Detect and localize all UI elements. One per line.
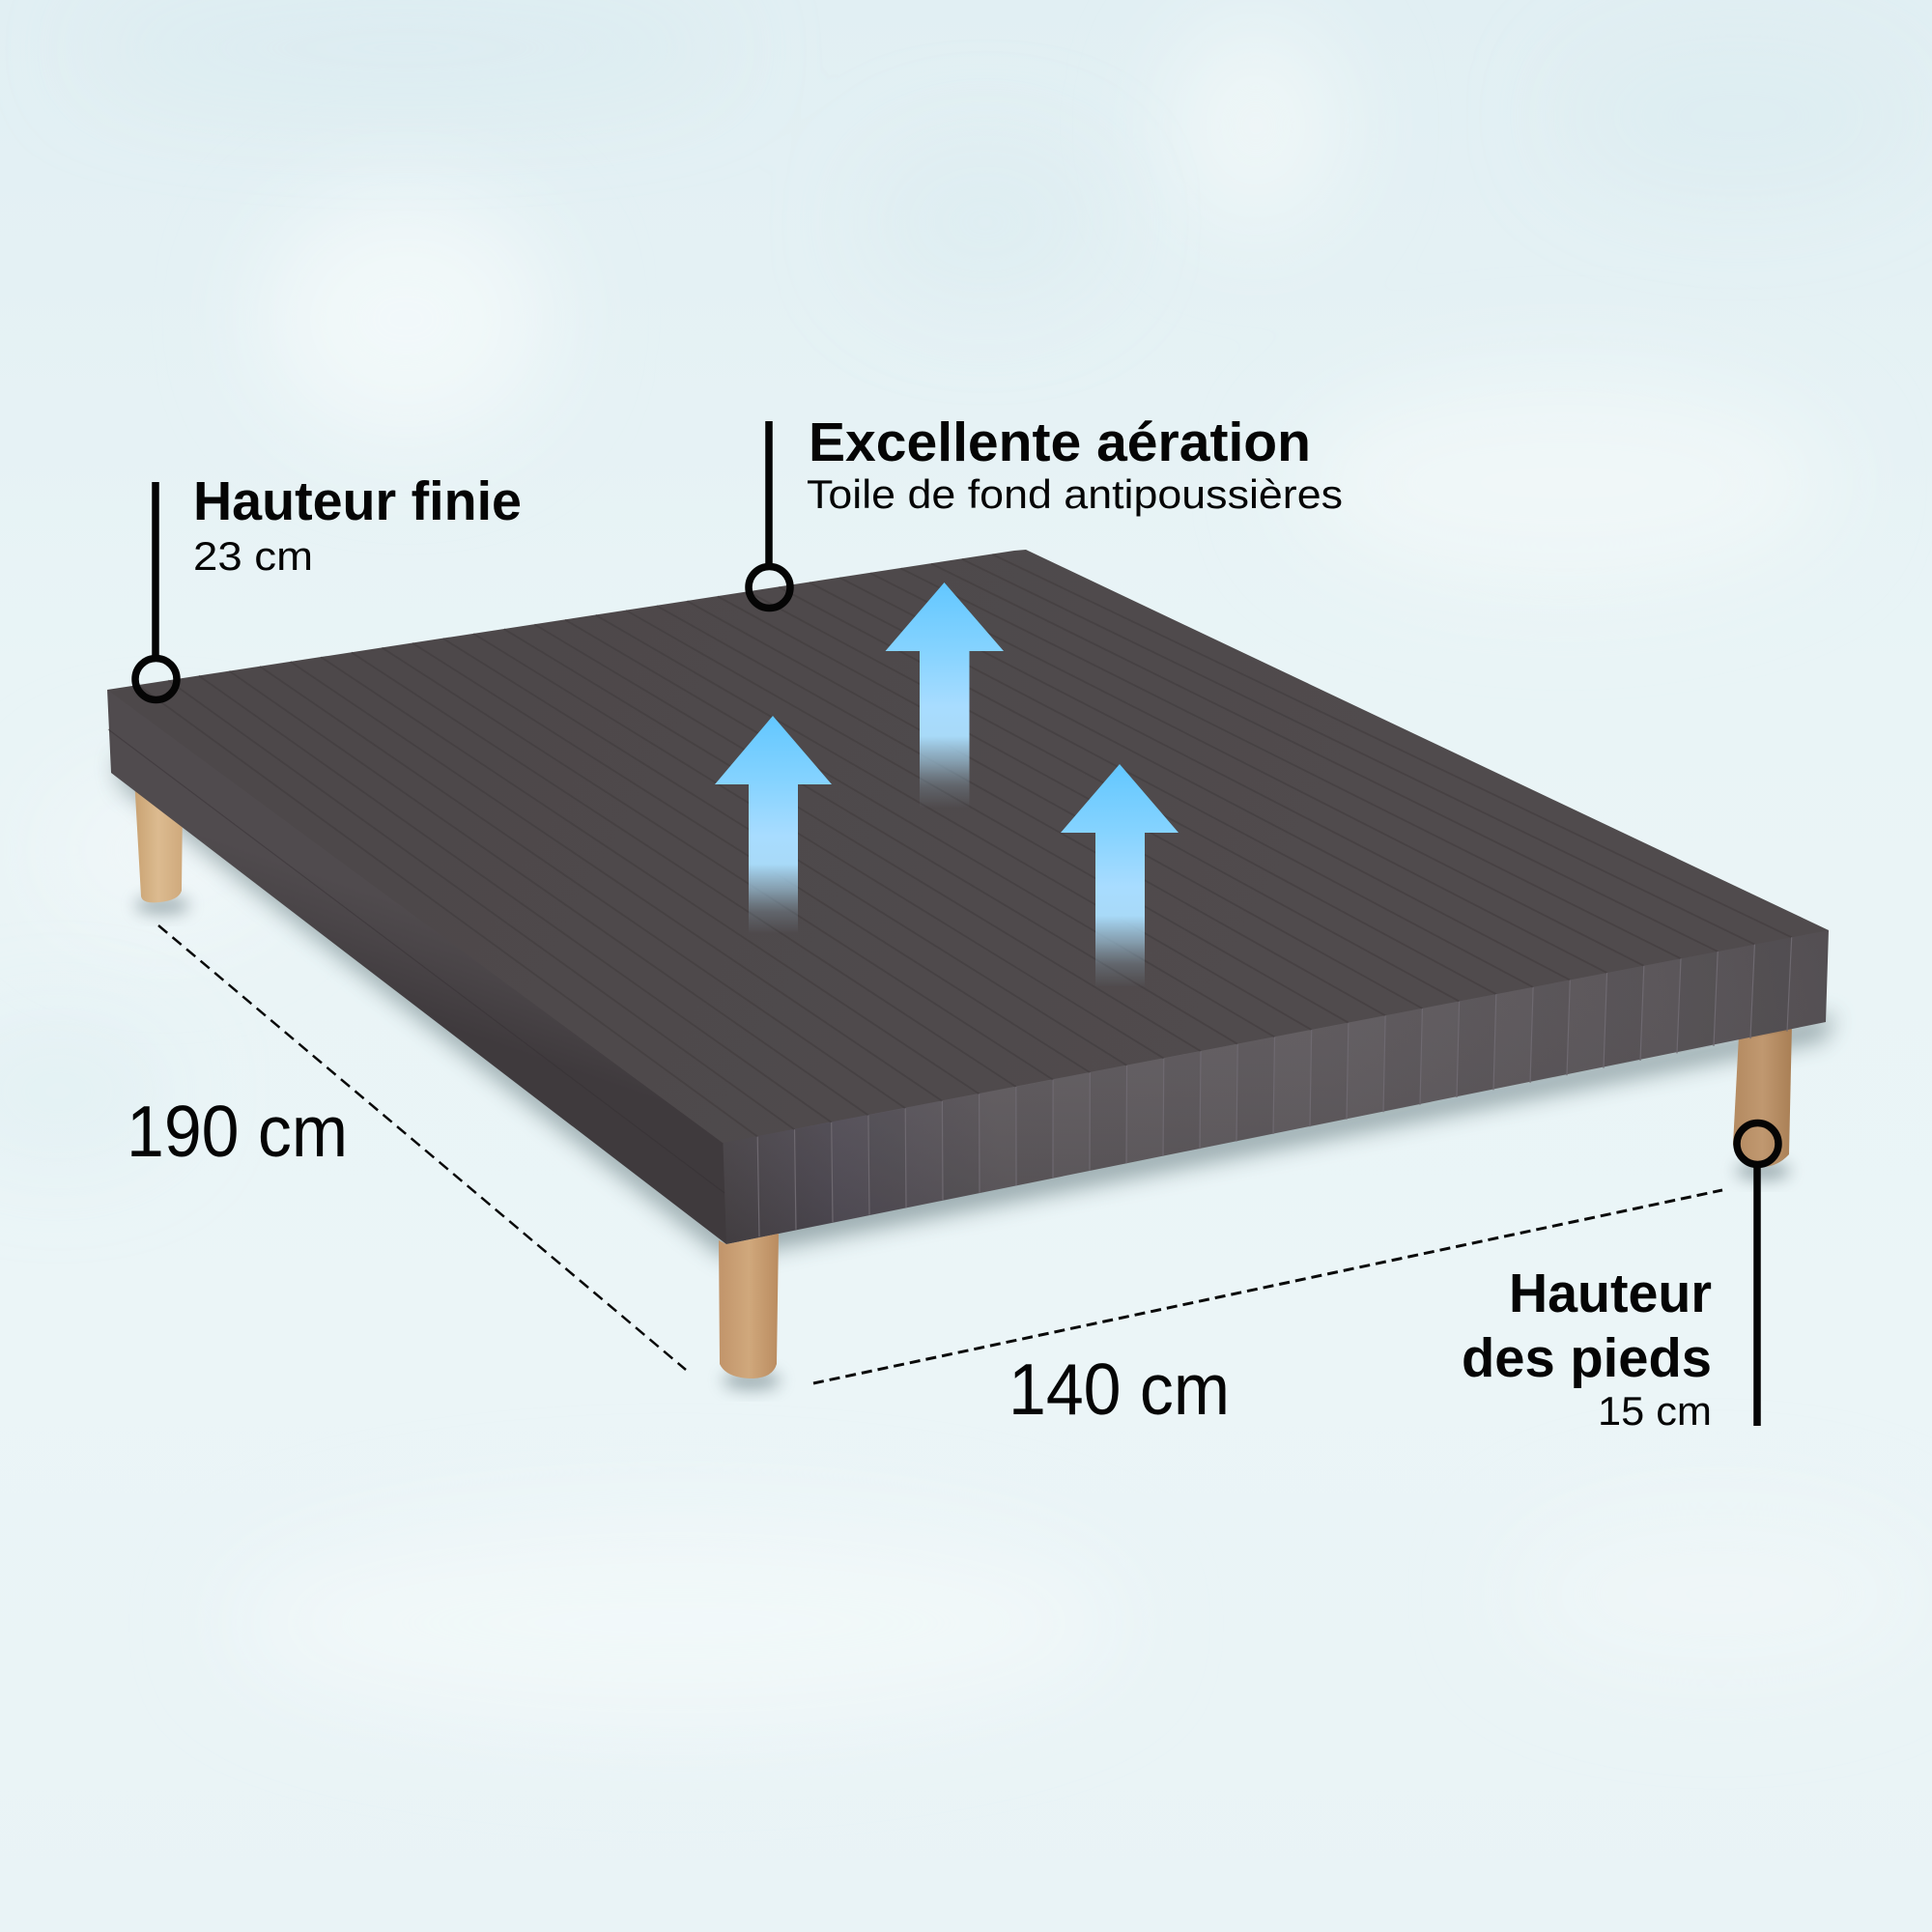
- leg: right: [1733, 1024, 1792, 1180]
- heading: leg height: des pieds: [1462, 1327, 1712, 1389]
- bed base: front side face: [723, 925, 1829, 1244]
- value: finished height: 23 cm: [193, 533, 313, 579]
- arrow: air flow centre: [885, 582, 1004, 809]
- label: width 140 cm: 140 cm: [1009, 1349, 1230, 1430]
- value: leg height: 15 cm: [1598, 1388, 1712, 1434]
- leg: front: [719, 1234, 781, 1390]
- heading: leg height: Hauteur: [1509, 1263, 1712, 1324]
- dimension line: length: [158, 925, 686, 1370]
- callout marker: ventilation: [749, 421, 790, 609]
- heading: finished height: Hauteur finie: [193, 470, 522, 532]
- arrow: air flow right: [1061, 764, 1179, 987]
- label: length 190 cm: 190 cm: [127, 1091, 348, 1172]
- bed base (grey fabric box): [107, 550, 1829, 1244]
- bed base: top face: [107, 550, 1829, 1143]
- arrow: air flow left: [715, 716, 832, 934]
- description: ventilation: Toile de fond antipoussières: [807, 471, 1343, 517]
- stitched line: left side face: [108, 729, 724, 1193]
- dimension line: width: [813, 1190, 1722, 1383]
- stitched lines: front face: [757, 937, 1792, 1236]
- shadow under bed base: [116, 753, 1835, 1258]
- heading: leg height: [1462, 1263, 1712, 1389]
- callout marker: leg height: [1737, 1122, 1778, 1426]
- stitched lines: top face: [138, 554, 1792, 1137]
- leg: back left: [134, 778, 189, 915]
- callout marker: finished height: [135, 482, 177, 699]
- heading: ventilation: Excellente aération: [809, 412, 1311, 473]
- bed base: left side face: [107, 690, 734, 1244]
